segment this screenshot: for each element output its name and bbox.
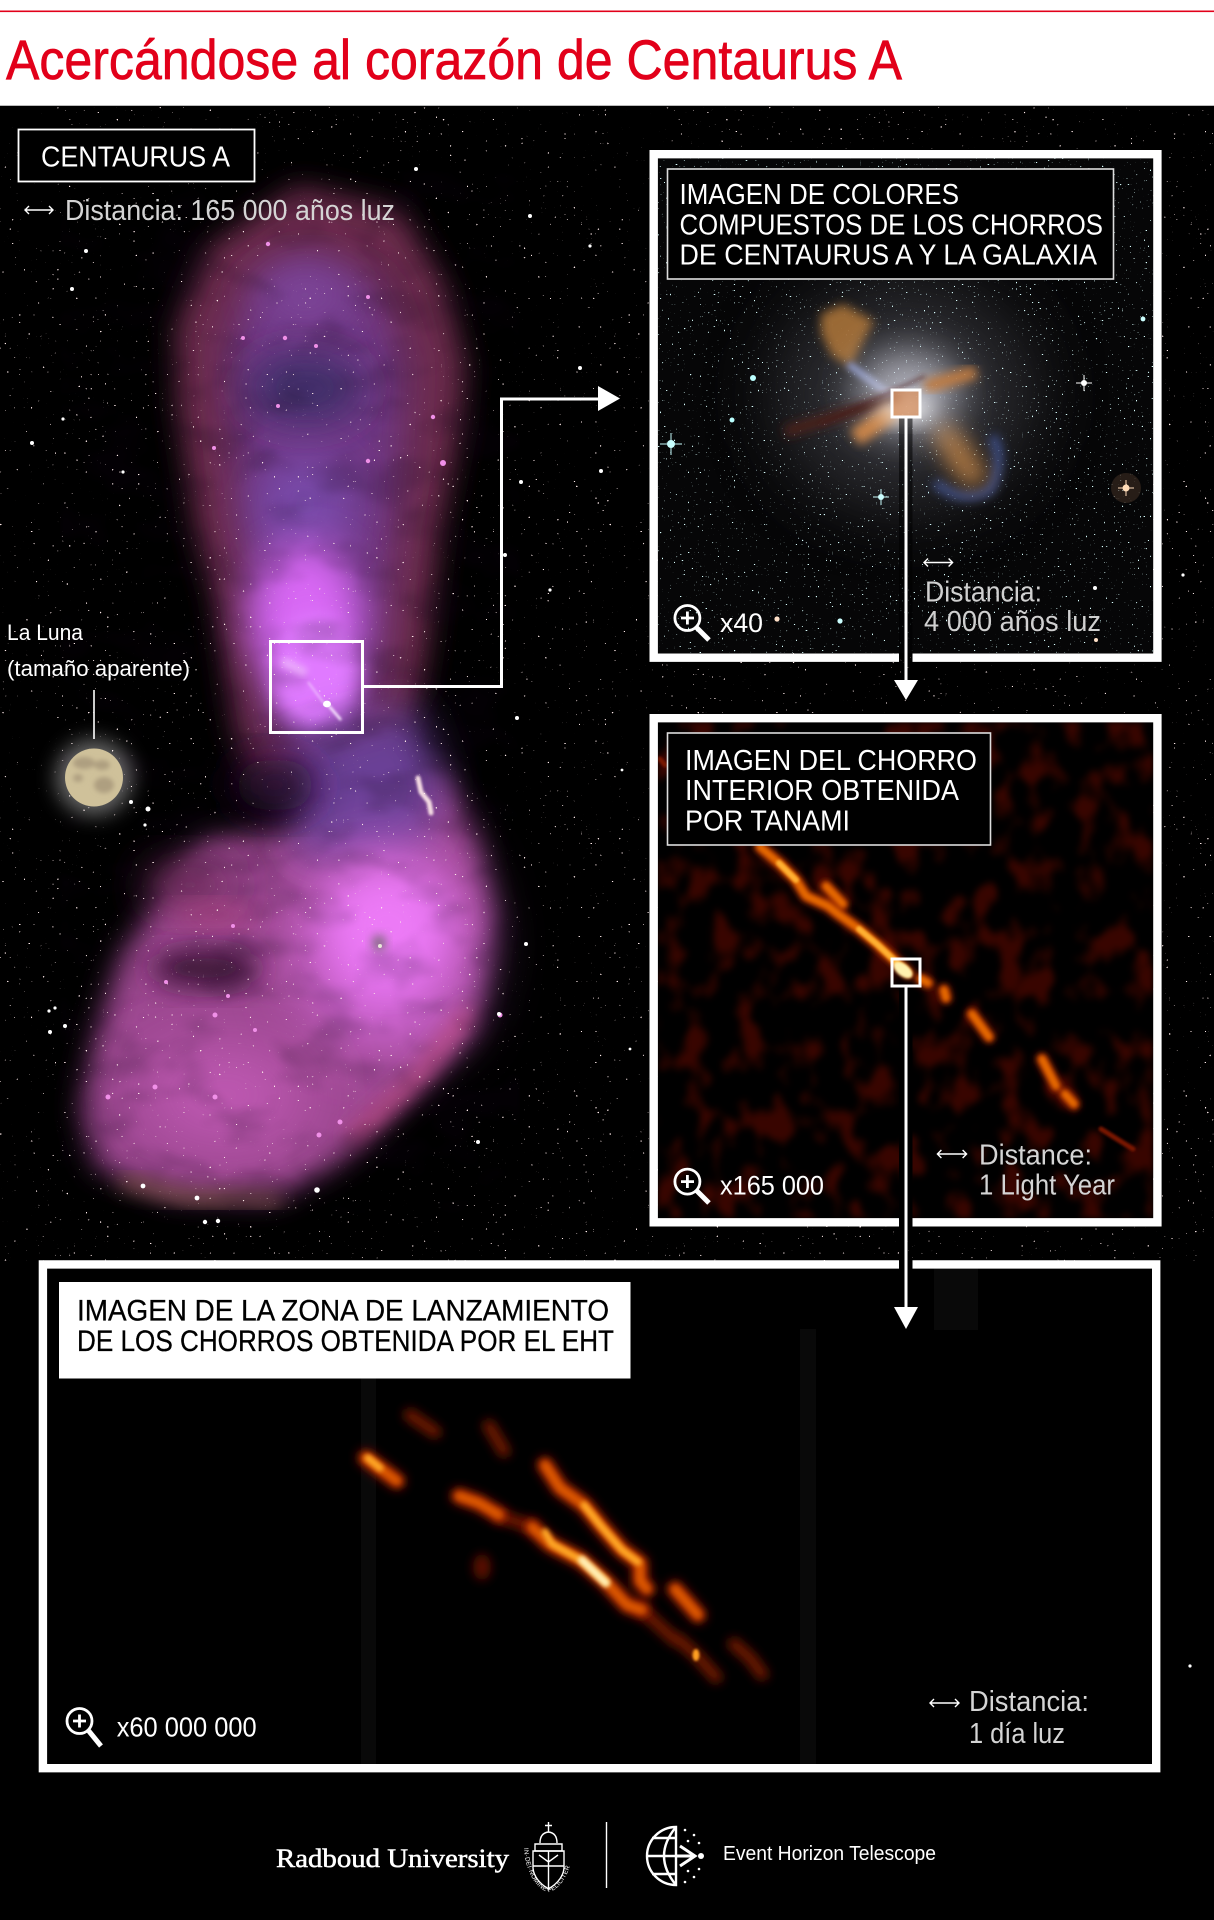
EHT jet image: [366, 1415, 762, 1677]
distance note: 1 light day: 1 día luz: [969, 1718, 1065, 1750]
galaxy photo: [658, 158, 1153, 653]
distance note: 1 light day: [930, 1686, 1089, 1750]
panel heading: [668, 733, 990, 845]
moon label: [7, 620, 190, 739]
panel heading: IMAGEN DEL CHORRO: [685, 745, 977, 777]
panel: EHT launching region image: [43, 1264, 1156, 1768]
panel heading: INTERIOR OBTENIDA: [685, 775, 960, 807]
label: Centaurus A: CENTAURUS A: [41, 142, 231, 174]
highlight box on nebula with connector arrow: [270, 386, 620, 732]
highlight box on jet core: [892, 959, 920, 986]
distance note: 1 light year: Distance:: [979, 1140, 1092, 1172]
brighter white stars: [30, 167, 1192, 1668]
panel: colour composite galaxy image: [654, 154, 1157, 658]
icon: magnifier x165 000: [675, 1169, 824, 1203]
panel heading: [59, 1282, 630, 1378]
panel frame: [654, 154, 1157, 658]
distance note: 4 000 light years: [924, 558, 1101, 638]
label: Centaurus A: [18, 130, 254, 182]
icon: EHT globe: [647, 1827, 704, 1885]
panel heading: POR TANAMI: [685, 806, 850, 838]
panel: TANAMI inner jet image: [654, 718, 1157, 1222]
icon: magnifier x40: [675, 606, 763, 640]
footer logos: [276, 1822, 936, 1892]
panel heading: IMAGEN DE LA ZONA DE LANZAMIENTO: [77, 1295, 609, 1328]
background star field: [0, 106, 1214, 1262]
bright stars: [660, 317, 1145, 642]
nebula: Centaurus A radio lobes: [60, 170, 520, 1215]
icon: magnifier x40: x40: [720, 608, 763, 638]
faint image seams: [361, 1268, 978, 1764]
Event Horizon Telescope wordmark: Event Horizon Telescope: [723, 1843, 936, 1865]
distance note: 4 000 light years: Distancia:: [925, 576, 1042, 608]
arrow shadow: [899, 418, 912, 653]
icon: magnifier x60 000 000: [67, 1708, 257, 1746]
icon: moon: [56, 740, 132, 816]
distance note: 165 000 light years: Distancia: 165 000 años luz: [65, 195, 395, 227]
moon label: (tamaño aparente): [7, 656, 190, 681]
panel heading: [668, 169, 1114, 279]
panel frame: [43, 1264, 1156, 1768]
panel frame: [654, 718, 1157, 1222]
panel heading: COMPUESTOS DE LOS CHORROS: [680, 210, 1103, 242]
distance note: 4 000 light years: 4 000 años luz: [924, 606, 1101, 638]
Radboud University wordmark: Radboud University: [276, 1844, 509, 1873]
distance note: 1 light year: [937, 1140, 1115, 1202]
icon: magnifier x165 000: x165 000: [720, 1171, 824, 1201]
panel heading: DE CENTAURUS A Y LA GALAXIA: [680, 240, 1098, 272]
highlight box on galaxy core: [892, 390, 920, 417]
icon: Radboud crest: IN·DEI·NOMINE·FELICITER: [524, 1848, 570, 1892]
arrow: TANAMI to EHT panel: [894, 986, 918, 1329]
title: Acercándose al corazón de Centaurus A: [6, 28, 903, 91]
icon: Radboud crest: [524, 1822, 570, 1892]
distance note: 1 light year: 1 Light Year: [979, 1170, 1115, 1202]
icon: magnifier x60 000 000: x60 000 000: [117, 1712, 257, 1743]
brighter pink stars on the nebula: [106, 242, 502, 1138]
radio jet image: [658, 722, 1153, 1218]
distance note: 1 light day: Distancia:: [969, 1686, 1089, 1718]
header band: [0, 0, 1214, 106]
arrow: galaxy to TANAMI panel: [894, 417, 918, 700]
divider: [606, 1822, 607, 1888]
moon label: La Luna: [7, 620, 84, 645]
panel heading: DE LOS CHORROS OBTENIDA POR EL EHT: [77, 1325, 614, 1358]
panel heading: IMAGEN DE COLORES: [680, 179, 959, 211]
